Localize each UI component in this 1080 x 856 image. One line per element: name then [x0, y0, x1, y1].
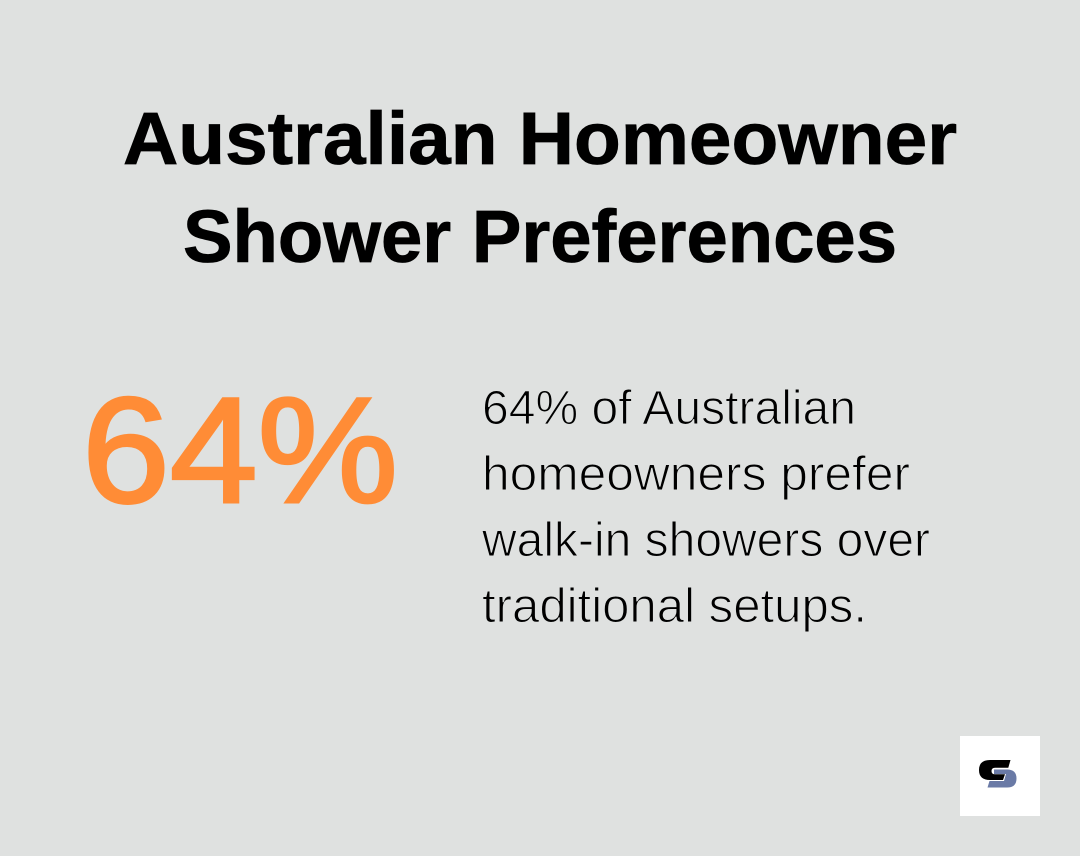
title: Australian Homeowner	[123, 97, 957, 180]
big statistic: 64%: 64%	[82, 366, 398, 534]
statistic description: homeowners prefer	[482, 448, 910, 501]
statistic description: 64% of Australian	[482, 382, 856, 435]
title	[123, 97, 957, 278]
statistic description: traditional setups.	[482, 580, 867, 633]
statistic description: walk-in showers over	[481, 514, 930, 567]
statistic description	[481, 382, 930, 633]
logo badge	[960, 736, 1040, 816]
title: Shower Preferences	[183, 195, 897, 278]
icon: S logo	[979, 760, 1016, 788]
